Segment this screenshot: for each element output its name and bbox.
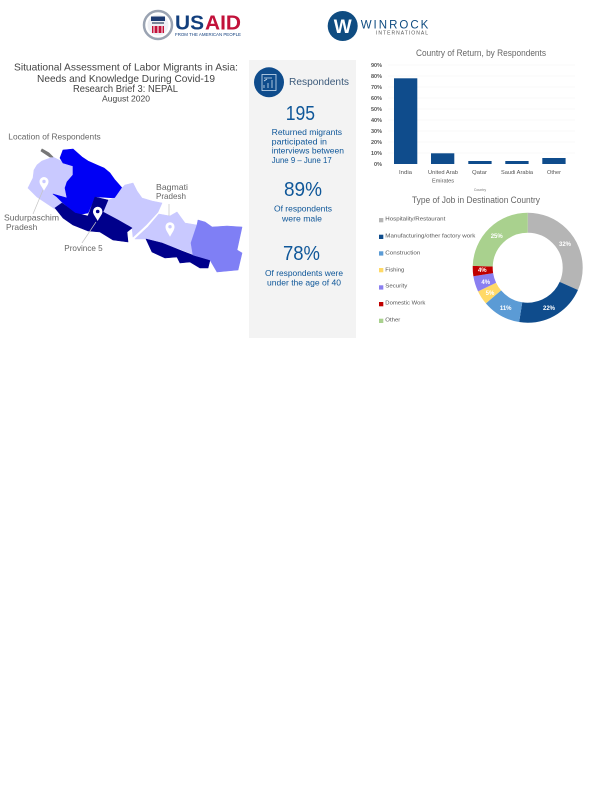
stat: 89% (274, 179, 332, 224)
map label: Bagmati: Pradesh (156, 191, 186, 201)
title: August 2020 (102, 94, 151, 104)
title: Needs and Knowledge During Covid-19 (37, 73, 215, 85)
bars (394, 78, 566, 164)
title: Situational Assessment of Labor Migrants in Asia: (14, 62, 238, 74)
chart title: Country of Return, by Respondents (416, 48, 546, 58)
legend (379, 217, 476, 324)
donut value labels: 5% (486, 291, 495, 297)
donut value labels: 4% (481, 280, 491, 286)
x axis labels: India (399, 170, 413, 176)
stat: 195: June 9 – June 17 (272, 155, 332, 165)
region: Sudurpaschim (28, 157, 73, 209)
y axis labels: 20% (371, 140, 382, 146)
logo: Winrock: WINROCK (361, 19, 429, 31)
legend: Domestic Work (385, 300, 426, 306)
panel: respondents (249, 60, 356, 338)
donut value labels: 22% (543, 306, 556, 312)
chart title: Type of Job in Destination Country (412, 195, 540, 205)
legend: Manufacturing/other factory work (385, 234, 476, 240)
map label: Sudurpaschim: Sudurpaschim (4, 213, 59, 223)
legend: Construction (385, 250, 420, 256)
map label: Bagmati (156, 182, 188, 201)
x axis labels: Saudi Arabia (501, 170, 534, 176)
y axis labels: 30% (371, 129, 382, 135)
donut value labels: 4% (478, 268, 487, 274)
y axis labels: 50% (371, 107, 382, 113)
region: Bagmati (135, 212, 197, 255)
logo: USAID (144, 11, 241, 39)
donut value labels: 32% (559, 242, 572, 248)
bar chart: country of return (371, 48, 575, 192)
stat: 78%: under the age of 40 (267, 278, 341, 288)
region: Province 1 (191, 220, 242, 272)
logo: USAID: FROM THE AMERICAN PEOPLE (175, 32, 241, 37)
y axis labels: 80% (371, 74, 382, 80)
stat: 195: interviews between (272, 146, 344, 156)
region: Province 5 (55, 197, 132, 242)
region: Province 2 (146, 239, 210, 268)
legend: Hospitality/Restaurant (385, 217, 446, 223)
y axis labels (371, 63, 382, 168)
pin: Province 5 (93, 207, 102, 221)
stat: 195: participated in (272, 136, 327, 146)
x axis labels: Other (547, 170, 561, 176)
map of Nepal (28, 149, 242, 272)
x axis labels: United Arab (428, 170, 458, 176)
donut value labels: 11% (500, 306, 512, 312)
region: Gandaki (103, 183, 162, 237)
title: Research Brief 3: NEPAL (73, 83, 178, 95)
stat: 78%: Of respondents were (265, 268, 343, 278)
legend: Other (385, 318, 400, 324)
donut value labels (478, 234, 572, 312)
stat: 89%: 89% (284, 179, 322, 201)
arrow marker (41, 149, 53, 157)
donut value labels: 25% (491, 234, 503, 240)
pin: Bagmati (166, 222, 174, 237)
logo: USAID: US (175, 12, 204, 34)
x axis labels: Qatar (472, 170, 487, 176)
map label: Province 5: Province 5 (64, 243, 103, 253)
stat: 195 (272, 103, 344, 165)
y axis labels: 0% (374, 162, 382, 168)
stat: 78%: 78% (283, 243, 320, 265)
legend: Security (385, 284, 408, 290)
leader lines (33, 190, 169, 243)
stat: 89%: Of respondents (274, 204, 332, 214)
y axis labels: 90% (371, 63, 382, 69)
stat: 89%: were male (281, 214, 322, 224)
x axis labels: Emirates (432, 179, 454, 185)
logo: Winrock (328, 11, 429, 41)
map heading: Location of Respondents (8, 131, 101, 141)
panel heading: Respondents (289, 77, 349, 88)
map label: Bagmati: Bagmati (156, 182, 188, 192)
donut rings (483, 223, 573, 313)
region: Karnali (53, 149, 122, 215)
logo: Winrock: W (334, 17, 352, 38)
y axis labels: 70% (371, 85, 382, 91)
stat: 195: Returned migrants (272, 127, 342, 137)
stat: 78% (265, 243, 343, 288)
logo: Winrock: INTERNATIONAL (376, 30, 428, 36)
pin: Sudurpaschim (40, 177, 48, 191)
x axis labels (399, 170, 561, 185)
donut chart: type of job (379, 195, 573, 324)
x axis title: Country (474, 188, 486, 192)
map label: Sudurpaschim: Pradesh (6, 222, 38, 232)
y axis labels: 40% (371, 118, 382, 124)
y axis labels: 10% (371, 151, 382, 157)
map label: Sudurpaschim (4, 213, 59, 232)
title (14, 62, 238, 104)
icon: report (254, 67, 284, 97)
stat: 195: 195 (286, 103, 315, 125)
y axis labels: 60% (371, 96, 382, 102)
legend: Fishing (385, 268, 404, 274)
logo: USAID: AID (205, 12, 241, 34)
